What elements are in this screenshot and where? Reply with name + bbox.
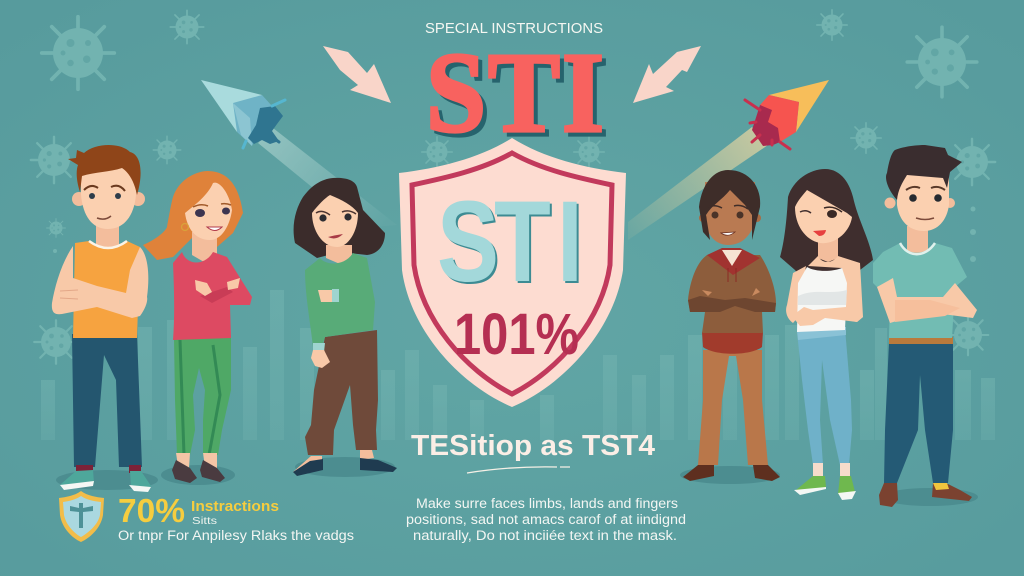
shield STI text: STI — [437, 178, 583, 306]
arrow: pink left pointer — [323, 46, 391, 103]
stat caption: Or tnpr For Anpilesy Rlaks the vadgs — [118, 528, 354, 544]
instruction paragraph: positions, sad not amacs carof of at iindignd — [406, 512, 686, 528]
arrow: pink right pointer — [633, 46, 701, 103]
instruction paragraph: Make surre faces limbs, lands and fingers — [416, 496, 678, 512]
main title STI: STI — [430, 34, 608, 161]
main title STI: STI — [426, 30, 604, 157]
shield STI text: STI — [439, 180, 585, 308]
icon: small shield — [59, 491, 104, 542]
person: woman in green top — [293, 178, 397, 477]
arrow: teal rocket top left — [201, 80, 285, 148]
shield — [399, 138, 626, 407]
small heading: SPECIAL INSTRUCTIONS — [425, 21, 603, 37]
person: woman in white tank — [780, 169, 873, 500]
stat: 70%: 70% — [118, 492, 185, 529]
heading: TESitiop as TST4: TESitiop as TST4 — [411, 430, 655, 462]
stat sublabel: Sitts — [192, 515, 217, 527]
underline stroke — [467, 467, 570, 473]
person: woman in pink top — [143, 171, 252, 485]
stat label: Instractions — [191, 498, 279, 515]
instruction paragraph: naturally, Do not inciiée text in the mask. — [413, 528, 677, 544]
shield percentage: 101% — [454, 302, 579, 367]
background bar chart — [41, 290, 995, 440]
person: child in brown hoodie — [680, 170, 780, 484]
person: man in teal t-shirt — [873, 145, 978, 507]
arrow: red rocket top right — [745, 80, 829, 149]
arrow: right light beam — [628, 127, 768, 240]
person: man in orange tank — [52, 145, 158, 492]
instruction paragraph — [406, 496, 686, 544]
arrow: left light beam — [258, 128, 397, 228]
virus icons — [31, 10, 995, 364]
